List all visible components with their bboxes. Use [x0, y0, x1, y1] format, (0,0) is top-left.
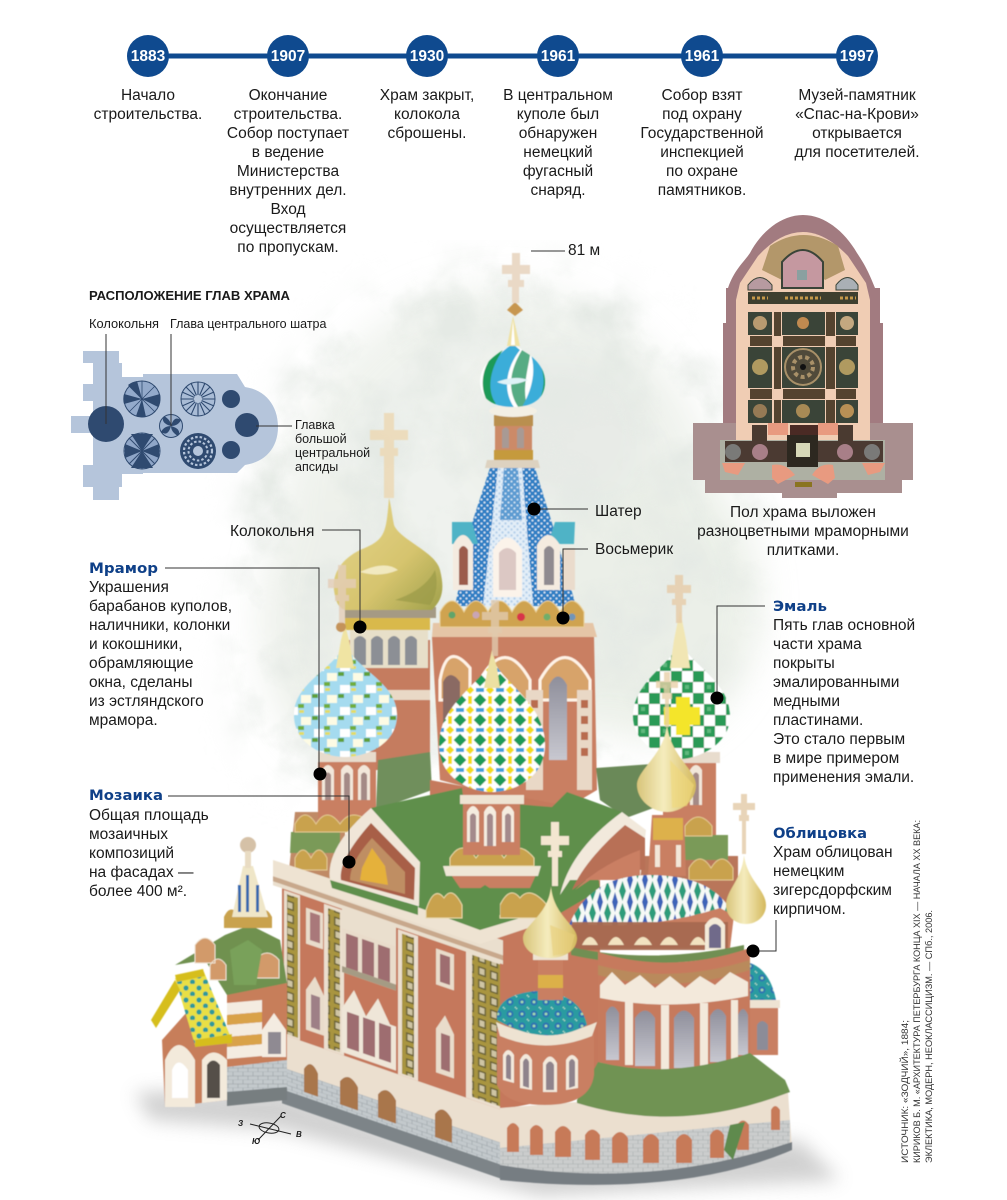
timeline item: 1907: Министерства — [237, 163, 339, 180]
chapel walls — [227, 983, 287, 1075]
callout: marble: наличники, колонки — [89, 617, 230, 634]
upper windows — [306, 908, 323, 949]
porch — [162, 1003, 227, 1107]
timeline item: 1930: Храм закрыт, — [380, 87, 474, 104]
floor caption: Пол храма выложен — [730, 504, 876, 521]
cross — [541, 822, 569, 886]
callout: enamel — [710, 599, 915, 786]
left lower tiers — [288, 812, 345, 880]
plan labels: Колокольня — [89, 317, 159, 331]
rosette top left — [123, 381, 160, 417]
right drum, green check dome — [633, 575, 738, 905]
cornice band — [273, 861, 503, 964]
rosette bottom right — [180, 433, 216, 469]
timeline item: 1907: по пропускам. — [237, 239, 339, 256]
plan labels: Главка — [295, 418, 335, 432]
plan labels — [89, 317, 370, 474]
timeline item: 1883 — [94, 35, 202, 123]
callout: octagon — [556, 541, 673, 624]
callout: facing brick: кирпичом. — [773, 901, 846, 918]
ground shadow — [135, 1090, 840, 1196]
callout: tent: Шатер — [595, 503, 642, 520]
timeline item: 1907: в ведение — [252, 144, 324, 161]
striped dome — [480, 345, 546, 408]
basement arches — [304, 1062, 318, 1097]
front gold dome — [523, 822, 577, 1000]
timeline item: 1961 bomb: снаряд. — [530, 182, 586, 199]
callout: marble: из эстляндского — [89, 693, 204, 710]
callout: marble: мрамора. — [89, 712, 158, 729]
right lower tiers — [640, 856, 738, 905]
center green roofs with gables — [273, 788, 646, 944]
callout: facing brick — [746, 826, 893, 958]
timeline item: 1961 bomb: 1961 — [541, 48, 576, 65]
left small apse with teal dome — [496, 991, 597, 1105]
tent — [224, 909, 272, 928]
timeline item: 1997 — [794, 35, 920, 161]
cross — [328, 565, 356, 623]
timeline item: 1997: Музей-памятник — [798, 87, 916, 104]
timeline item: 1907: Вход — [270, 201, 306, 218]
central tent — [440, 468, 584, 627]
north chapel — [151, 837, 287, 1107]
floor caption: плитками. — [767, 542, 839, 559]
lower windows — [306, 974, 324, 1036]
callout: mosaic: мозаичных — [89, 826, 168, 843]
timeline item: 1907 — [227, 35, 349, 256]
callout: enamel: в мире примером — [773, 750, 899, 767]
timeline item: 1961 protection: памятников. — [658, 182, 746, 199]
chapel roof — [175, 925, 287, 995]
timeline item: 1907: строительства. — [234, 106, 342, 123]
floor outline — [693, 215, 913, 498]
cross — [667, 575, 691, 623]
callout: enamel: Пять глав основной — [773, 617, 915, 634]
callout: enamel: эмалированными — [773, 674, 899, 691]
apse windows — [606, 1006, 619, 1060]
source note: ЭКЛЕКТИКА, МОДЕРН, НЕОКЛАССИЦИЗМ. — СПб., 2006. — [923, 910, 934, 1163]
timeline item: 1883: Начало — [121, 87, 175, 104]
timeline item: 1930: 1930 — [410, 48, 444, 65]
source note — [899, 820, 934, 1163]
callout: enamel: Это стало первым — [773, 731, 905, 748]
panel: dome layout plan — [71, 289, 370, 500]
left mosaic gable — [330, 808, 420, 906]
timeline item: 1930: сброшены. — [388, 125, 466, 142]
right gold dome with drum — [637, 672, 696, 876]
plan leader lines — [106, 334, 292, 426]
callout: enamel: применения эмали. — [773, 769, 914, 786]
timeline item: 1961 bomb — [503, 35, 613, 199]
source note: КИРИКОВ Б. М. «АРХИТЕКТУРА ПЕТЕРБУРГА КОНЦА XIX — НАЧАЛА XX ВЕКА: — [911, 820, 922, 1163]
tent windows — [453, 535, 575, 597]
main apse — [598, 948, 780, 1072]
timeline item: 1997: для посетителей. — [794, 144, 920, 161]
timeline item: 1961 protection: инспекцией — [660, 144, 744, 161]
plan labels: центральной — [295, 446, 370, 460]
callout: facing brick: Облицовка — [773, 826, 867, 842]
timeline item: 1961 bomb: обнаружен — [519, 125, 597, 142]
cathedral illustration — [151, 253, 792, 1185]
back green roofs — [376, 752, 675, 830]
timeline item: 1961 protection: по охране — [666, 163, 738, 180]
callout: mosaic: композиций — [89, 845, 174, 862]
callout: mosaic — [89, 788, 356, 900]
height label: 81 m: 81 м — [568, 242, 600, 259]
timeline item: 1961 bomb: В центральном — [503, 87, 613, 104]
panel: marble floor plan — [693, 215, 913, 498]
compass: З — [238, 1119, 243, 1128]
timeline item: 1907: осуществляется — [230, 220, 346, 237]
center dome — [426, 600, 547, 918]
tile columns — [287, 894, 298, 1038]
callout: tent — [528, 502, 642, 520]
timeline item: 1907: Окончание — [249, 87, 327, 104]
timeline item: 1997: «Спас-на-Крови» — [795, 106, 919, 123]
cross — [482, 600, 508, 656]
octagonal tower — [432, 623, 597, 812]
callout: mosaic: более 400 м². — [89, 883, 187, 900]
callout: facing brick: немецким — [773, 863, 844, 880]
rosette top right — [181, 382, 215, 416]
callout: marble: барабанов куполов, — [89, 598, 232, 615]
callout: enamel: пластинами. — [773, 712, 863, 729]
timeline item: 1930: колокола — [394, 106, 460, 123]
base of apse — [500, 1053, 792, 1185]
compass: С — [280, 1111, 286, 1120]
callout: mosaic: Общая площадь — [89, 807, 209, 824]
timeline item: 1961 protection: Государственной — [640, 125, 764, 142]
tent drum and striped dome — [478, 253, 548, 468]
timeline item: 1961 protection: 1961 — [685, 48, 720, 65]
source note: ИСТОЧНИК: «ЗОДЧИЙ», 1884; — [899, 1020, 910, 1163]
callout: bell tower — [230, 523, 366, 634]
cloud background — [234, 266, 772, 784]
callout: marble: обрамляющие — [89, 655, 194, 672]
height label: 81 m — [531, 242, 600, 259]
callout: facing brick: зигерсдорфским — [773, 882, 892, 899]
plan labels: Глава центрального шатра — [170, 317, 326, 331]
timeline item: 1907: внутренних дел. — [229, 182, 347, 199]
timeline item: 1930 — [380, 35, 474, 142]
callout: marble: Мрамор — [89, 561, 158, 577]
timeline item: 1883: строительства. — [94, 106, 202, 123]
cross on bell tower — [370, 413, 408, 498]
compass: Ю — [252, 1137, 260, 1146]
apse half dome — [569, 875, 744, 964]
far right gold dome — [726, 794, 766, 924]
compass — [238, 1111, 302, 1146]
timeline item: 1907: 1907 — [271, 48, 305, 65]
green underlayer — [415, 800, 600, 940]
bell tower gold dome — [334, 413, 442, 770]
timeline item: 1997: открывается — [812, 125, 902, 142]
right gable — [560, 812, 646, 895]
apse columns — [625, 1000, 738, 1072]
green skirt — [577, 1053, 790, 1117]
timeline item: 1883: 1883 — [131, 48, 166, 65]
basement bands — [282, 1034, 500, 1143]
callout: mosaic: Мозаика — [89, 788, 163, 804]
floor panels — [722, 292, 885, 487]
callout: bell tower: Колокольня — [230, 523, 314, 540]
callout: enamel: медными — [773, 693, 840, 710]
top cross — [502, 253, 530, 303]
timeline item: 1961 protection — [640, 35, 764, 199]
timeline item: 1961 bomb: фугасный — [523, 163, 593, 180]
plan heading: РАСПОЛОЖЕНИЕ ГЛАВ ХРАМА — [89, 289, 290, 303]
spiral rosette — [160, 414, 182, 438]
callout: marble — [89, 561, 326, 780]
yellow roof — [175, 972, 232, 1045]
callout: enamel: Эмаль — [773, 599, 827, 615]
callout: enamel: покрыты — [773, 655, 835, 672]
callout: facing brick: Храм облицован — [773, 844, 893, 861]
callout: marble: окна, сделаны — [89, 674, 192, 691]
timeline — [94, 35, 920, 256]
timeline item: 1961 bomb: куполе был — [517, 106, 599, 123]
left back dome — [288, 565, 397, 880]
cross — [656, 672, 678, 727]
facade pilasters — [284, 890, 300, 1041]
callout: marble: и кокошники, — [89, 636, 183, 653]
callout: octagon: Восьмерик — [595, 541, 673, 558]
plan labels: апсиды — [295, 460, 338, 474]
timeline item: 1961 protection: Собор взят — [662, 87, 742, 104]
timeline item: 1961 protection: под охрану — [662, 106, 742, 123]
plan labels: большой — [295, 432, 347, 446]
timeline item: 1907: Собор поступает — [227, 125, 349, 142]
plan domes — [88, 381, 259, 469]
floor caption: разноцветными мраморными — [697, 523, 909, 540]
timeline item: 1961 bomb: немецкий — [523, 144, 593, 161]
apses — [748, 250, 858, 290]
timeline item: 1997: 1997 — [840, 48, 874, 65]
callout: marble: Украшения — [89, 579, 169, 596]
callout: mosaic: на фасадах — — [89, 864, 194, 881]
right side mass — [479, 880, 600, 1110]
callout: enamel: части храма — [773, 636, 862, 653]
main facade — [273, 861, 600, 1179]
rosette bottom left — [124, 433, 160, 469]
compass: В — [296, 1130, 302, 1139]
plan outline — [71, 351, 278, 500]
